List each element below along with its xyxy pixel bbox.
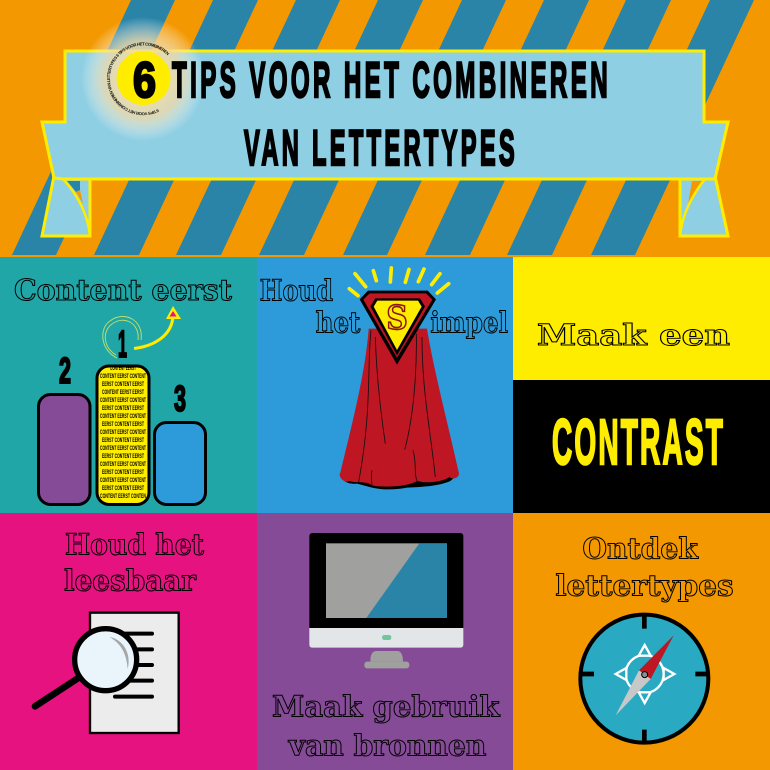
podium bar 1 with repeated text: EERST CONTENT EERST [102,469,144,476]
panel: header with striped background [0,0,770,257]
sun badge with circular text [83,18,201,139]
heading: maak gebruik van bronnen: van bronnen [288,728,486,762]
podium bar 1 with repeated text: EERST CONTENT EERST [102,485,144,492]
icon: magnifying glass [35,629,137,706]
icon: shield [360,291,436,365]
heading: maak gebruik van bronnen: Maak gebruik [272,689,501,723]
icon: cape [340,329,459,489]
podium bar 1 with repeated text: CONTENT EERST CONTENT [100,461,146,468]
podium bar 3 [154,422,206,504]
heading: houd het simpel: Houd [260,273,333,307]
sun badge with circular text: 6 TIPS VOOR HET COMBINEREN VAN LETTERTYPES 6 TIPS VOOR HET COMBINEREN [107,42,170,116]
panel: houd het simpel [257,257,514,513]
podium bar 1 with repeated text: CONTENT EERST CONTENT [100,429,146,436]
podium bar 1 with repeated text: CONTENT EERST CONTENT [100,445,146,452]
heading: maak een: Maak een [537,318,730,352]
title: 6 [133,52,156,108]
panel: maak gebruik van bronnen [257,513,514,770]
podium numbers: 2 [59,350,71,391]
icon: compass [580,615,708,743]
title [133,52,611,176]
icon: rays [349,268,449,296]
heading: houd het simpel: het [316,305,361,339]
heading: ontdek lettertypes [555,532,734,602]
podium bar 1 with repeated text: CONTENT EERST CONTEN [100,493,146,500]
podium bar 1 with repeated text: CONTENT EERST CONTENT [100,397,146,404]
panel: ontdek lettertypes [513,513,770,770]
banner ribbon [42,51,728,236]
icon: monitor [309,533,463,668]
podium bar 1 with repeated text: CONTENT EERST CONTENT [100,373,146,380]
podium numbers [59,324,186,419]
podium bar 1 with repeated text: EERST CONTENT EERST [102,453,144,460]
podium bar 1 with repeated text: CONTENT EERST CONTENT [100,477,146,484]
podium bar 1 with repeated text [97,365,149,504]
podium bar 1 with repeated text: EERST CONTENT EERST [102,405,144,412]
heading: houd het leesbaar: Houd het [65,528,205,562]
heading: content eerst: Content eerst [14,273,233,307]
podium numbers: 1 [118,324,127,366]
podium bar 1 with repeated text: EERST CONTENT EERST [102,421,144,428]
podium bar 1 with repeated text: CONTENT EERST [110,365,136,372]
podium bar 1 with repeated text: EERST CONTENT EERST [102,381,144,388]
heading: maak gebruik van bronnen [272,689,501,762]
podium numbers: 3 [174,378,186,419]
panel: maak een contrast [513,257,770,513]
panel: content eerst [0,257,257,513]
icon: swirl and arrow [103,306,181,358]
icon: shield: S [386,298,408,337]
podium bar 1 with repeated text: CONTENT EERST CONTENT [100,413,146,420]
podium bar 2 [38,394,90,504]
panel: houd het leesbaar [0,513,257,770]
podium bar 1 with repeated text: CONTENT EERST EERST [102,389,144,396]
heading: houd het simpel [260,273,508,339]
heading: ontdek lettertypes: Ontdek [582,532,699,566]
heading: houd het leesbaar [64,528,205,597]
heading: houd het leesbaar: leesbaar [64,563,197,597]
icon: document [90,613,179,733]
podium bar 1 with repeated text: EERST CONTENT EERST [102,437,144,444]
heading: houd het simpel: impel [430,305,508,339]
heading: ontdek lettertypes: lettertypes [555,568,734,602]
